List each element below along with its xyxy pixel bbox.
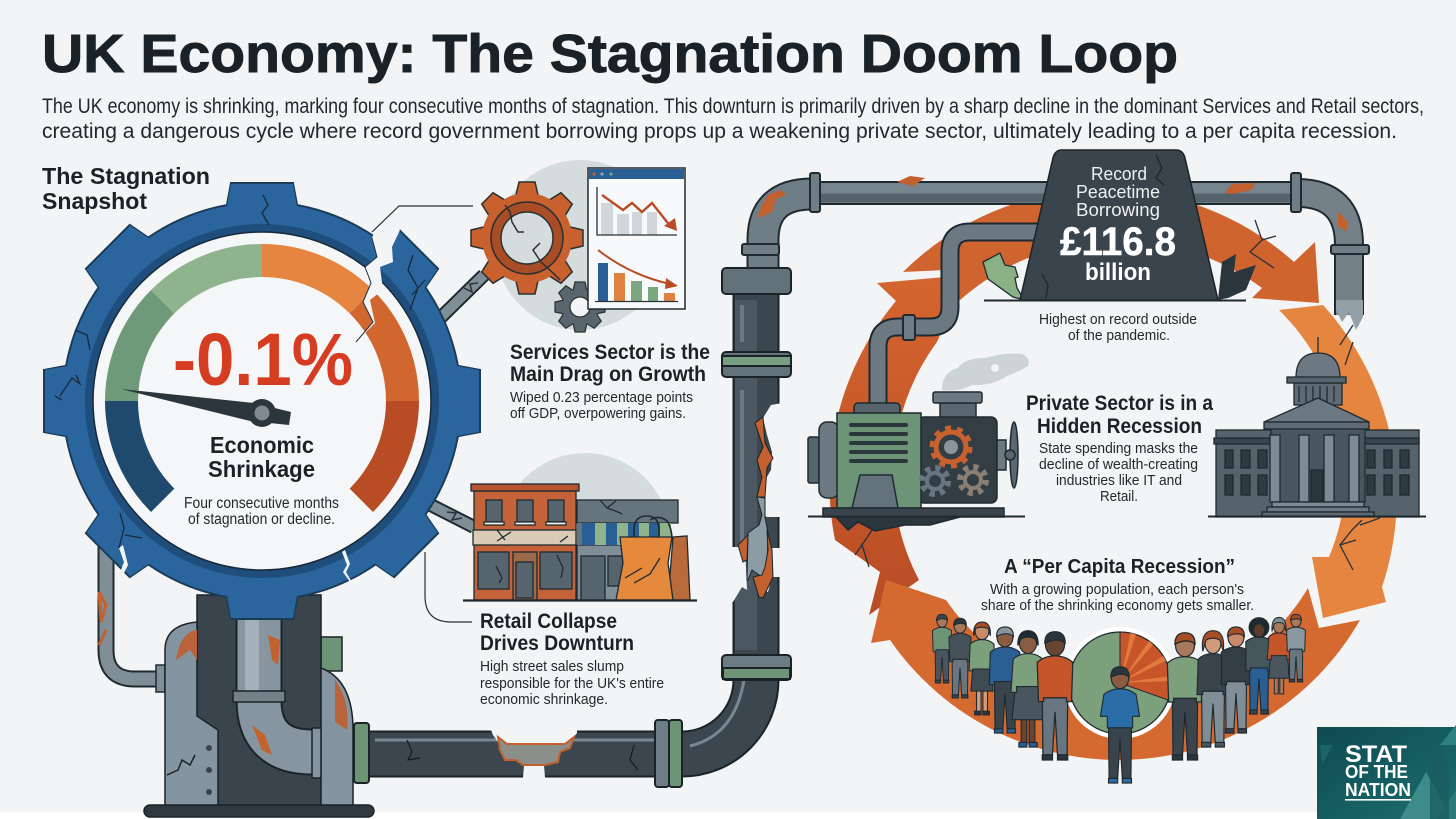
- text: record peacetime borrowing: [1076, 164, 1160, 220]
- figure: 116.8 billion: [1060, 220, 1176, 286]
- arrow: left segment: [829, 277, 955, 615]
- connector pipes to sector icons: [415, 275, 484, 527]
- person 1: [932, 614, 952, 683]
- person 10: [1246, 618, 1272, 714]
- heading: retail collapse: Drives Downturn: [480, 632, 634, 655]
- body: retail collapse: economic shrinkage.: [480, 691, 608, 708]
- body: retail collapse: [480, 658, 664, 708]
- body: per capita recession: With a growing population, each person's: [990, 581, 1244, 598]
- heading: per capita recession: A “Per Capita Recession”: [1004, 555, 1235, 578]
- figure: 116.8 billion: billion: [1085, 259, 1151, 286]
- grey shop: [577, 500, 678, 600]
- label: economic shrinkage: [208, 432, 315, 482]
- person 11: [1267, 617, 1291, 694]
- gauge description: [184, 495, 339, 528]
- body: private sector: [1039, 440, 1198, 505]
- heading: the stagnation snapshot: [42, 163, 210, 214]
- circular arrow loop: [829, 189, 1397, 760]
- gear cracks: [356, 212, 400, 342]
- orange cracked gear: [471, 182, 583, 294]
- heading: private sector: [1026, 392, 1213, 438]
- body: private sector: Retail.: [1100, 488, 1138, 505]
- body: services sector: Wiped 0.23 percentage points: [510, 389, 693, 406]
- heading: private sector: Hidden Recession: [1037, 415, 1202, 438]
- heading: retail collapse: Retail Collapse: [480, 610, 617, 633]
- label: economic shrinkage: Shrinkage: [208, 456, 315, 482]
- small side pipe: [99, 530, 165, 692]
- body: private sector: State spending masks the: [1039, 440, 1198, 457]
- pipe joints: [354, 268, 791, 787]
- body: services sector: off GDP, overpowering gains.: [510, 405, 686, 422]
- person 5: [1011, 631, 1045, 747]
- callout lines: [372, 206, 473, 622]
- heading: the stagnation snapshot: The Stagnation: [42, 163, 210, 189]
- heading: services sector: [510, 341, 710, 386]
- body: borrowing note: [1039, 311, 1197, 344]
- falling bar chart: [595, 250, 678, 302]
- person 2: [949, 618, 971, 698]
- small grey gear: [555, 282, 605, 332]
- people and pie chart: [932, 614, 1305, 783]
- body: per capita recession: share of the shrinking economy gets smaller.: [981, 597, 1254, 614]
- person 12: [1287, 614, 1305, 682]
- body: services sector: [510, 389, 693, 422]
- heading: the stagnation snapshot: Snapshot: [42, 188, 147, 214]
- pie chart: shrinking share: [1064, 627, 1176, 739]
- logo: stat of the nation: [1317, 725, 1456, 819]
- body: retail collapse: High street sales slump: [480, 658, 624, 675]
- person 3: [969, 622, 995, 715]
- pipe damage: [407, 403, 782, 778]
- person 6: [1037, 632, 1073, 760]
- gauge description: Four consecutive months: [184, 495, 339, 512]
- heading: services sector: Services Sector is the: [510, 341, 710, 364]
- chart window: [588, 168, 685, 309]
- body: borrowing note: Highest on record outside: [1039, 311, 1197, 328]
- person 9: [1221, 627, 1251, 733]
- text: record peacetime borrowing: Record: [1091, 164, 1147, 184]
- brick shop: [471, 484, 579, 600]
- falling line chart: [597, 187, 677, 235]
- body: retail collapse: responsible for the UK's entire: [480, 675, 664, 692]
- person 7: [1167, 633, 1203, 760]
- dial needle: [121, 389, 291, 427]
- logo wordmark: STAT: [1345, 741, 1407, 768]
- icon: private sector engine: [808, 354, 1029, 531]
- body: private sector: industries like IT and: [1056, 472, 1182, 489]
- intro text: [42, 95, 1424, 143]
- gauge description: of stagnation or decline.: [188, 511, 335, 528]
- upper grey pipework: [763, 193, 1349, 405]
- label: economic shrinkage: Economic: [210, 432, 314, 458]
- logo wordmark: NATION: [1345, 780, 1411, 800]
- title: UK Economy: The Stagnation Doom Loop: [42, 24, 1178, 84]
- heading: retail collapse: [480, 610, 634, 655]
- heading: services sector: Main Drag on Growth: [510, 363, 706, 386]
- person 4: [989, 627, 1021, 733]
- gauge dial segments: [122, 260, 402, 500]
- text: record peacetime borrowing: Borrowing: [1076, 200, 1160, 220]
- icon: borrowing weight: [983, 150, 1256, 300]
- engine gears: [922, 429, 986, 494]
- shopping bag: [616, 516, 690, 600]
- gauge stand: [144, 595, 374, 817]
- arrow: bottom segment: [871, 580, 1360, 760]
- intro text: creating a dangerous cycle where record government borrowing props up a weakening private sector, ultimately leading to a per capita recession.: [42, 120, 1397, 143]
- main dark pipe: [369, 294, 782, 778]
- gear teeth and body: [44, 183, 480, 619]
- body: per capita recession: [981, 581, 1254, 614]
- icon: services sector gears and charts: [471, 160, 685, 332]
- icon: government building: [1208, 337, 1426, 517]
- central person: [1100, 667, 1140, 783]
- smoke: [942, 354, 1029, 390]
- text: record peacetime borrowing: Peacetime: [1076, 182, 1160, 202]
- reading: -0.1%: -0.1%: [173, 318, 353, 401]
- gauge: cracked blue gear: [44, 183, 480, 619]
- body: borrowing note: of the pandemic.: [1068, 327, 1170, 344]
- person 8: [1197, 631, 1229, 747]
- figure: 116.8 billion: £116.8: [1060, 220, 1176, 264]
- arrow: top segment: [903, 189, 1319, 303]
- body: private sector: decline of wealth-creating: [1039, 456, 1198, 473]
- logo wordmark: OF THE: [1345, 762, 1408, 782]
- pipe flanges: [742, 173, 1369, 340]
- arrow: right segment: [1279, 305, 1397, 618]
- logo wordmark: [1345, 741, 1411, 801]
- heading: private sector: Private Sector is in a: [1026, 392, 1213, 415]
- icon: retail high street: [463, 453, 697, 602]
- pipe rust patches: [757, 176, 1348, 232]
